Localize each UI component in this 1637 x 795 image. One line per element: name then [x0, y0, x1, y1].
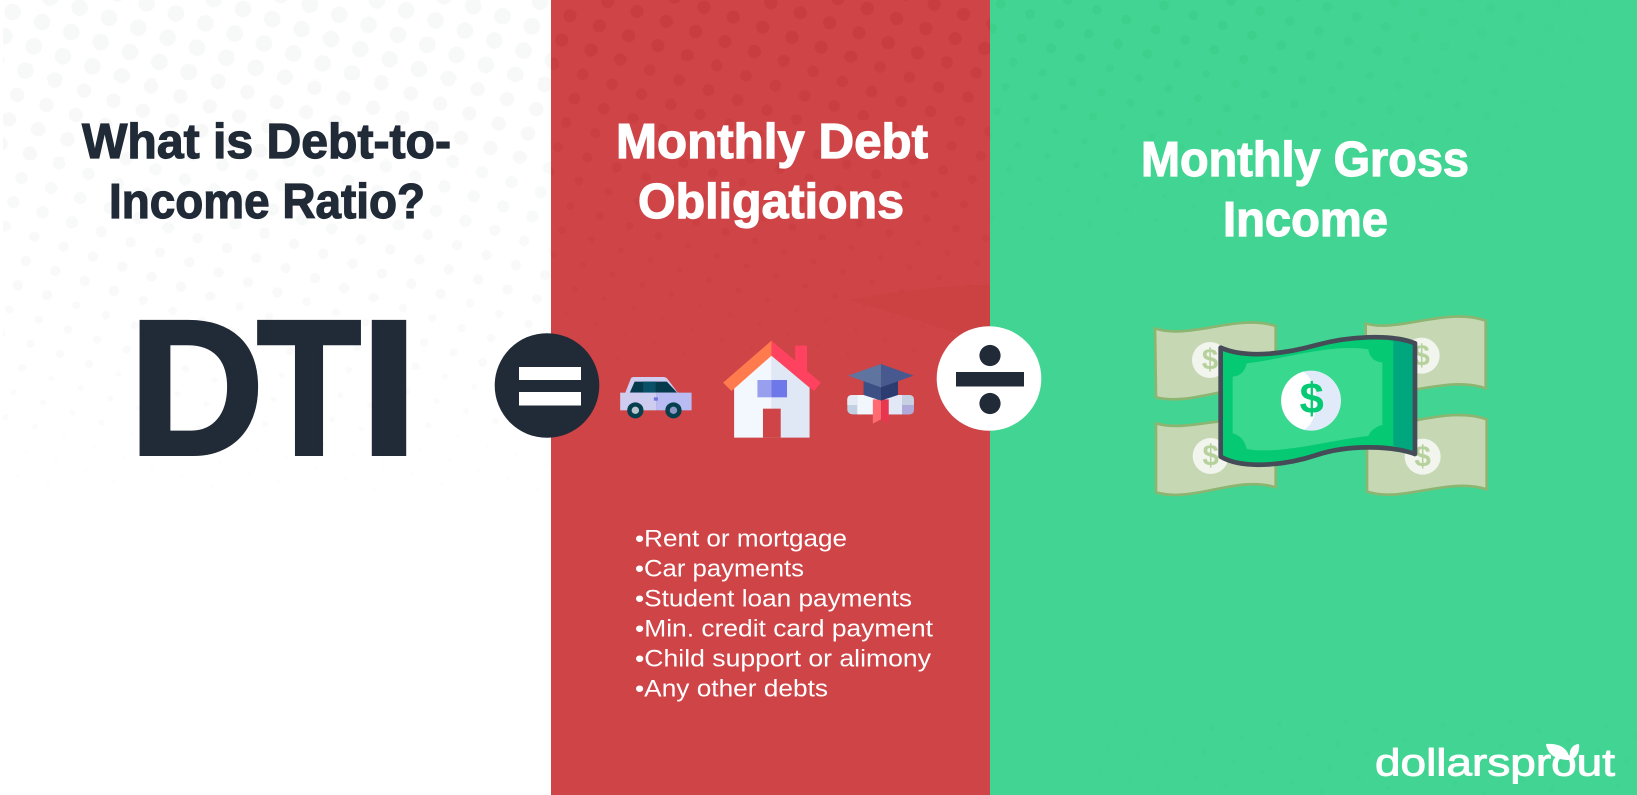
icon: division sign circle [937, 326, 1041, 431]
heading: Monthly Gross Income: Income [1223, 193, 1388, 247]
background bill: bottom left [1156, 419, 1276, 495]
icon: money bills [1155, 317, 1487, 495]
background bill: bottom right [1367, 415, 1487, 495]
heading: Monthly Gross Income: Monthly Gross [1141, 133, 1469, 187]
large DTI lettering: I [360, 280, 418, 495]
heading: What is Debt-to-Income Ratio?: Income Ratio? [109, 175, 425, 229]
list of monthly debts: •Rent or mortgage [635, 526, 847, 552]
list of monthly debts: •Student loan payments [635, 586, 912, 612]
background bill: bottom right: $ [1415, 440, 1431, 473]
large DTI lettering [129, 280, 418, 495]
list of monthly debts [635, 526, 933, 702]
background bill: top left [1155, 322, 1276, 399]
panel: monthly debt obligations (red) [551, 0, 990, 795]
large DTI lettering: T [257, 280, 361, 495]
heading: Monthly Gross Income [1141, 133, 1469, 247]
list of monthly debts: •Any other debts [635, 676, 828, 702]
list of monthly debts: •Car payments [635, 556, 804, 582]
icon: house [723, 341, 821, 438]
list of monthly debts: •Child support or alimony [635, 646, 932, 672]
panel: monthly gross income (green) [990, 0, 1637, 795]
logo: dollarsprout: dollarsprout [1375, 742, 1616, 784]
heading: What is Debt-to-Income Ratio?: What is Debt-to- [82, 115, 451, 169]
background bill: bottom left: $ [1203, 440, 1219, 473]
heading: Monthly Debt Obligations: Obligations [638, 175, 904, 229]
icon: car [620, 377, 692, 418]
heading: Monthly Debt Obligations: Monthly Debt [616, 115, 928, 169]
background bill: top left: $ [1202, 343, 1218, 376]
panel: what is DTI (white) [0, 0, 551, 795]
background bill: top right [1366, 317, 1486, 392]
background bill: top right: $ [1414, 339, 1430, 372]
list of monthly debts: •Min. credit card payment [635, 616, 933, 642]
heading: Monthly Debt Obligations [616, 115, 928, 229]
large DTI lettering: D [129, 280, 264, 495]
icon: diploma and graduation cap [847, 364, 914, 424]
main dollar bill: $ [1300, 376, 1324, 424]
heading: What is Debt-to-Income Ratio? [82, 115, 451, 229]
icon: equals sign circle [495, 333, 599, 438]
main dollar bill [1221, 337, 1415, 465]
